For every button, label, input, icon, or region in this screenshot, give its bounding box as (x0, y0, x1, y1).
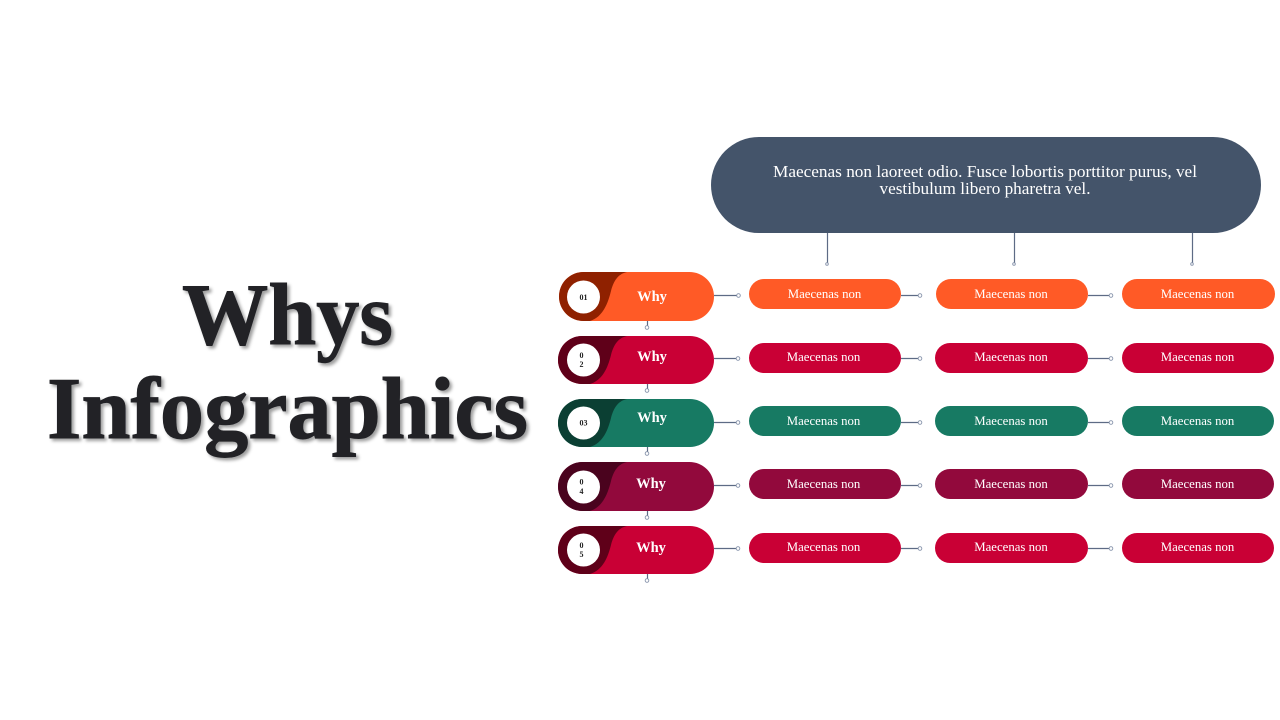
row 1 main pill: Why (637, 289, 668, 305)
connectors from callout (826, 233, 1193, 265)
title (47, 267, 528, 458)
row 4 main pill: Why (636, 476, 667, 492)
row 3 main pill: 03 (580, 418, 588, 428)
row 1 main pill (559, 272, 714, 329)
row 5 main pill (558, 526, 714, 582)
title: Infographics (47, 361, 528, 458)
row 4 options: Maecenas non (787, 477, 861, 491)
row 2 main pill: 2 (580, 360, 584, 369)
row 5 (558, 526, 1274, 582)
row 4 main pill: 4 (580, 487, 584, 496)
top description callout (711, 137, 1261, 233)
title: Whys (182, 267, 393, 364)
row 1 options: Maecenas non (1161, 287, 1235, 301)
row 4 options: Maecenas non (1161, 477, 1235, 491)
row 5 main pill: 5 (580, 550, 584, 559)
row 4 options (714, 469, 1274, 499)
row 2 options: Maecenas non (974, 350, 1048, 364)
row 1 options: Maecenas non (788, 287, 862, 301)
row 5 options (714, 533, 1274, 563)
row 1 options (714, 279, 1275, 309)
top description callout: vestibulum libero pharetra vel. (880, 179, 1090, 198)
row 5 main pill: Why (636, 540, 667, 556)
row 3 (558, 399, 1274, 455)
row 4 (558, 462, 1274, 519)
row 1 main pill: 01 (580, 293, 588, 302)
row 3 options: Maecenas non (1161, 414, 1235, 428)
row 4 options: Maecenas non (974, 477, 1048, 491)
row 2 main pill: 0 (580, 351, 584, 360)
top description callout: Maecenas non laoreet odio. Fusce lobortis porttitor purus, vel (773, 162, 1197, 181)
row 5 options: Maecenas non (787, 540, 861, 554)
row 3 options: Maecenas non (974, 414, 1048, 428)
row 4 main pill (558, 462, 714, 519)
row 2 main pill: Why (637, 349, 668, 365)
row 5 main pill: 0 (580, 541, 584, 550)
row 1 options: Maecenas non (974, 287, 1048, 301)
row 2 (558, 336, 1274, 392)
row 5 options: Maecenas non (974, 540, 1048, 554)
row 3 main pill: Why (637, 410, 668, 426)
row 3 main pill (558, 399, 714, 455)
row 5 options: Maecenas non (1161, 540, 1235, 554)
row 2 options: Maecenas non (787, 350, 861, 364)
row 4 main pill: 0 (580, 478, 584, 486)
row 2 options: Maecenas non (1161, 350, 1235, 364)
row 2 options (714, 343, 1274, 373)
row 3 options (714, 406, 1274, 436)
row 1 (559, 272, 1275, 329)
row 2 main pill (558, 336, 714, 392)
row 3 options: Maecenas non (787, 414, 861, 428)
